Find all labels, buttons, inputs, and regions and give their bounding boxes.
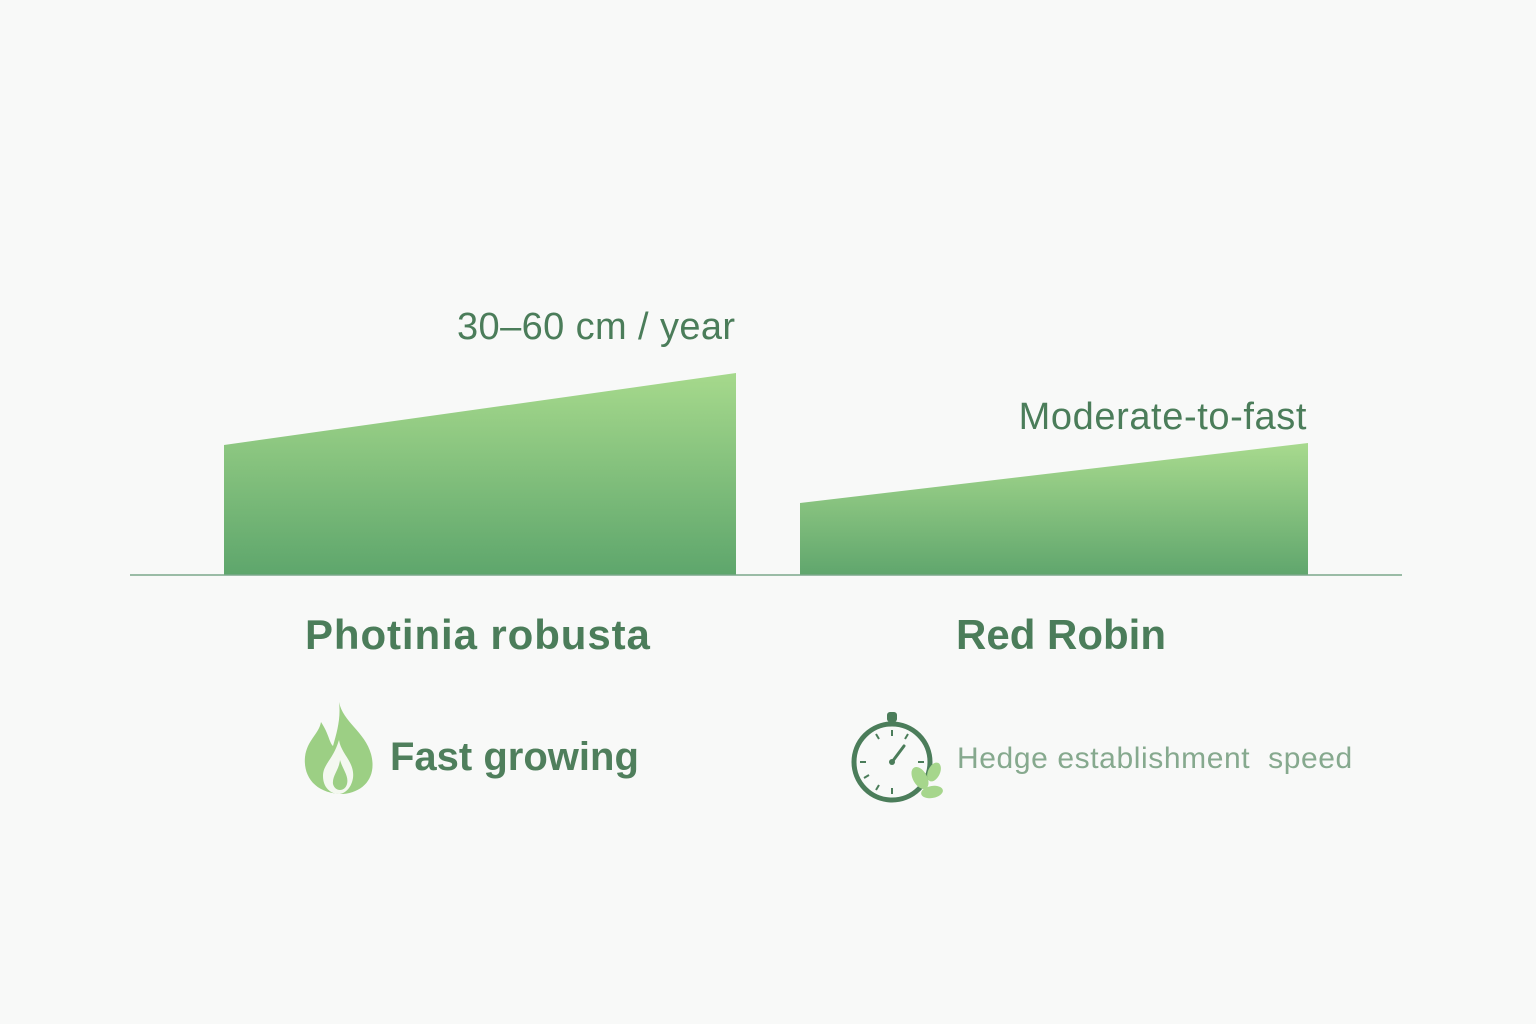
text: Hedge establishment speed: Hedge establishment speed <box>957 742 1353 775</box>
label: Moderate-to-fast: Moderate-to-fast <box>1019 396 1307 438</box>
icon: flame <box>305 702 373 794</box>
heading: Red Robin: Red Robin <box>956 611 1166 658</box>
text: Fast growing: Fast growing <box>390 735 639 779</box>
bar: Photinia robusta <box>224 373 736 575</box>
label: 30–60 cm / year: 30–60 cm / year <box>457 306 735 348</box>
heading: Photinia robusta: Photinia robusta <box>305 611 651 658</box>
icon: stopwatch with leaves <box>854 712 944 800</box>
bar: Red Robin <box>800 443 1308 575</box>
